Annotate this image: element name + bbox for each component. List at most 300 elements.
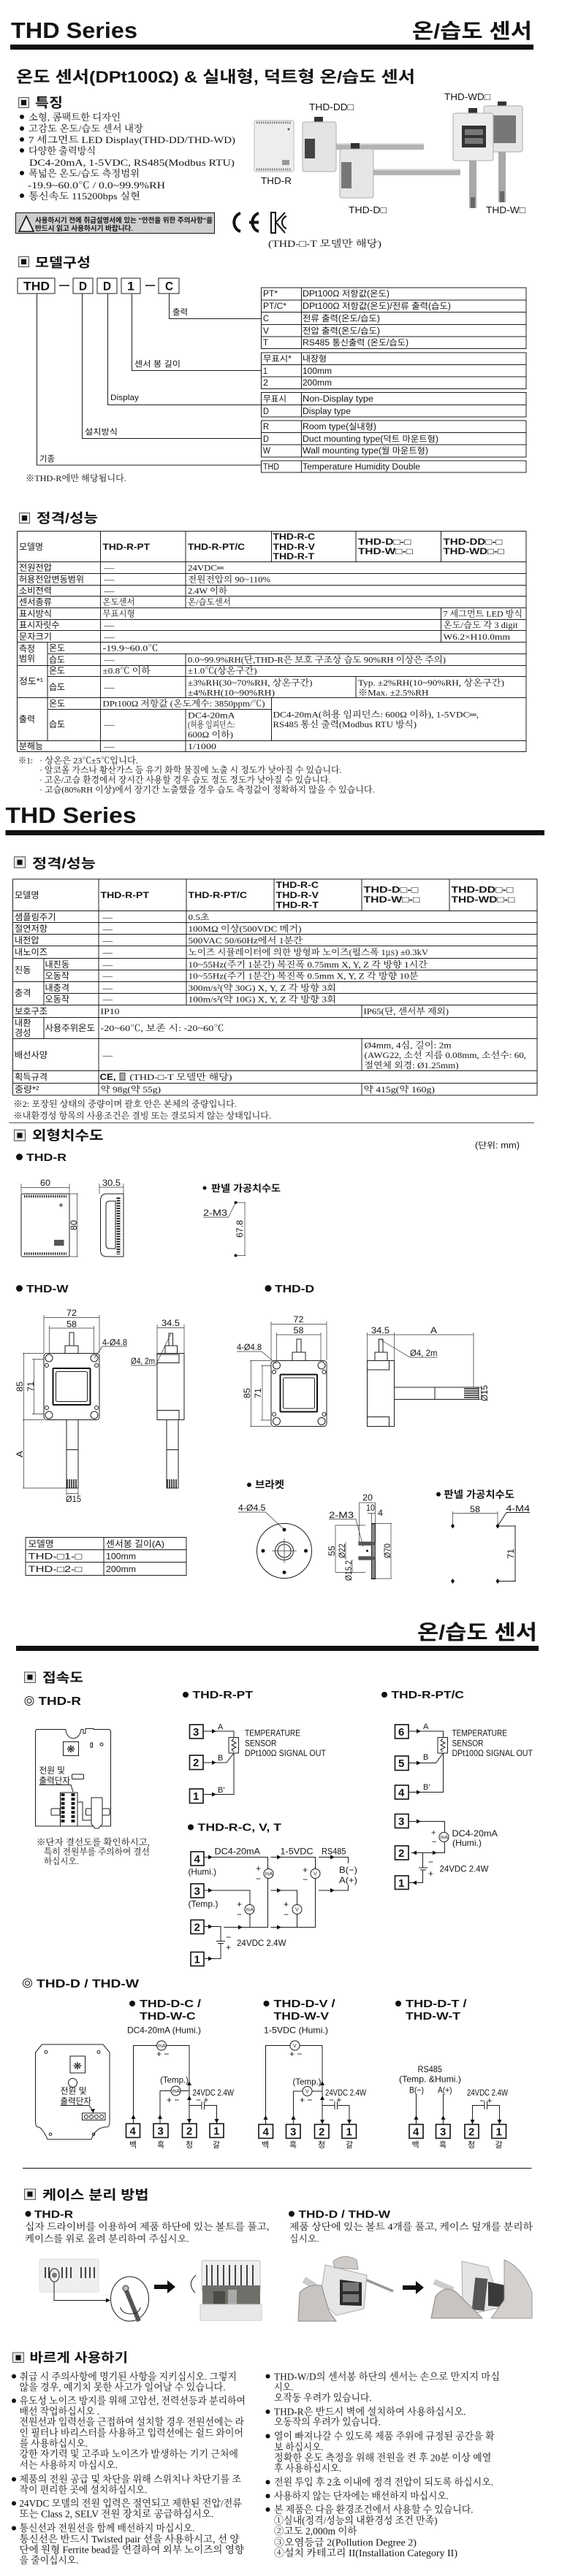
option tables: 전압 출력(온도/습도) (303, 326, 380, 336)
ratings table 2: THD-R-PT (101, 890, 150, 900)
wiring: THD-D-T / THD-W-T: 갈 (495, 2139, 503, 2150)
section heading: dimensions (15, 1129, 520, 1151)
ratings table 1: 습도 (49, 654, 65, 664)
ratings table 2: 500VAC 50/60Hz에서 1분간 (189, 935, 303, 946)
caution box: 반드시 읽고 사용하시기 바랍니다. (35, 224, 133, 233)
ratings table 1: 표시자릿수 (19, 620, 60, 630)
wiring: THD-R-PT/C: 1 (398, 1877, 404, 1890)
dimension drawing: panel cut-out bracket: 4-M4 (506, 1503, 530, 1514)
ratings footnotes 1: ※1: (18, 755, 33, 765)
wiring: THD-D-T / THD-W-T: A(+) (438, 2085, 452, 2096)
ratings table 2: THD-R-C (276, 880, 319, 890)
section heading: wiring: 접속도 (42, 1671, 83, 1685)
wiring: THD-D-C / THD-W-C: 2 (186, 2125, 192, 2138)
cautions: right column: 오동작의 우려가 있습니다. (274, 2415, 381, 2427)
wiring: THD-R-C, V, T: + (303, 1865, 308, 1875)
cautions: left column: 작이 편리한 곳에 설치하십시오. (19, 2484, 148, 2496)
wiring: THD-R-C, V, T: V (295, 1907, 299, 1913)
cautions: left column: 단에 원형 Ferrite bead를 연결하여 외부 노이즈의 영향 (19, 2544, 244, 2556)
ratings table 1: 온/습도센서 (188, 596, 231, 607)
ratings table 1: RS485 통신 출력(Modbus RTU 방식) (273, 718, 417, 729)
wiring: THD-D-V / THD-W-V: V (293, 2044, 297, 2049)
wiring: THD-R-C, V, T: − (284, 1909, 289, 1920)
wiring: THD-D-T / THD-W-T: B(−) (409, 2085, 424, 2096)
wiring: THD-D-V / THD-W-V: (Temp.) (292, 2077, 322, 2087)
wiring: THD-D-C / THD-W-C: 3 (158, 2125, 164, 2138)
wiring: THD-D-V / THD-W-V: 백 (262, 2140, 269, 2150)
wiring: THD-D-V / THD-W-V (259, 1998, 367, 2150)
ratings footnotes 2 (9, 1098, 534, 1123)
sensor length table: THD-□2-□ (28, 1564, 82, 1574)
wiring: THD-R-C, V, T: THD-R-C, V, T (197, 1822, 281, 1834)
wiring: THD-R-PT: 1 (193, 1790, 199, 1803)
wiring: THD-R-PT: SENSOR (245, 1738, 277, 1748)
code boxes (18, 278, 179, 294)
section heading: ratings 2 (15, 856, 96, 871)
dimension drawing: THD-D (237, 1283, 490, 1427)
wiring note (37, 1836, 150, 1866)
wiring: THD-R board: 전원 및 (39, 1766, 65, 1776)
ratings table 1: — (103, 562, 115, 572)
model footnote: ※THD-R에만 해당됩니다. (26, 472, 126, 483)
code boxes: 1 (127, 279, 134, 294)
ratings table 2: THD-DD□-□ (452, 885, 513, 895)
ratings table 2: 절연저항 (15, 924, 48, 934)
wiring note: 특히 전원부를 주의하여 결선 (44, 1846, 150, 1857)
wiring: THD-D-C / THD-W-C: 백 (129, 2140, 137, 2150)
ratings table 1: DPt100Ω 저항값 (온도계수: 3850ppm/℃) (102, 698, 265, 708)
cautions: right column: THD-R은 반드시 벽에 설치하여 사용하십시오. (274, 2405, 466, 2417)
wiring: THD-D-V / THD-W-V: 1-5VDC (Humi.) (264, 2025, 328, 2036)
wiring: THD-D-V / THD-W-V: 1 (346, 2126, 352, 2138)
ratings table 2: 사용주위온도 (45, 1023, 95, 1033)
wiring: THD-R-PT: DPt100Ω SIGNAL OUT (245, 1748, 327, 1758)
cautions: right column: 보 하십시오. (274, 2441, 323, 2453)
option tables: 무표시* (263, 354, 292, 364)
ratings table 1: 범위 (19, 653, 35, 664)
wiring: THD-D-V / THD-W-V: THD-D-V / (273, 1998, 335, 2010)
wiring: THD-D-V / THD-W-V: + − (300, 2095, 312, 2105)
wiring: THD-R-C, V, T: + (284, 1899, 289, 1909)
front view: 85 (242, 1388, 252, 1398)
cautions: right column: ④설치 카테고리 II(Installation Category II) (274, 2547, 457, 2558)
photo: THD-R: THD-R (261, 175, 292, 186)
features list: DC4-20mA, 1-5VDC, RS485(Modbus RTU) (29, 157, 235, 168)
side view: 34.5 (371, 1325, 390, 1335)
section heading: features (19, 96, 63, 110)
wiring: THD-R-PT/C: − (432, 1838, 436, 1847)
wiring: THD-R-C, V, T: V (314, 1872, 317, 1877)
wiring: THD-R board: THD-R (38, 1695, 82, 1708)
option tables: 100mm (303, 367, 332, 376)
features list: 통신속도 115200bps 실현 (28, 191, 140, 202)
front view (238, 1503, 311, 1579)
dimension drawing: panel cut-out bracket: 71 (506, 1549, 516, 1559)
wiring: THD-R-C, V, T: + (237, 1899, 242, 1909)
page header 2: THD Series (6, 802, 544, 835)
wiring: THD-D board: ❋ (73, 2061, 82, 2071)
ratings table 1: — (103, 719, 115, 729)
ratings table 2: 100m/s²(약 10G) X, Y, Z 각 방향 3회 (189, 993, 336, 1005)
ratings table 1: 센서종류 (19, 597, 52, 607)
cautions: right column: 사용하지 않는 단자에는 배선하지 마십시오. (274, 2490, 449, 2502)
cautions: right column: ②고도 2,000m 이하 (274, 2525, 357, 2537)
ratings table 2: CE, (99, 1072, 115, 1082)
dimension drawing: panel cut-out bracket (436, 1490, 530, 1584)
cautions: left column: 배선 작업하십시오 . (19, 2405, 99, 2417)
wiring: THD-R-C, V, T: B(−) (339, 1865, 357, 1875)
product title: 온도 센서(DPt100Ω) & 실내형, 덕트형 온/습도 센서 (16, 68, 415, 86)
ratings table 2: 10~55Hz(주기 1분간) 복진폭 0.5mm X, Y, Z 각 방향 10분 (189, 970, 419, 981)
ratings table 1: ※Max. ±2.5%RH (358, 688, 429, 698)
section heading: dimensions: (단위: mm) (475, 1141, 520, 1151)
dimension drawing: THD-W: THD-W (26, 1283, 69, 1295)
wiring: THD-D-T / THD-W-T: THD-D-T / (406, 1998, 466, 2010)
wiring: THD-R-C, V, T: − (237, 1909, 242, 1920)
side view (99, 1178, 123, 1257)
ratings table 1: 온도 (49, 698, 65, 708)
wiring: THD-R-C, V, T: 1-5VDC (281, 1846, 314, 1856)
leader labels: Display (110, 394, 140, 402)
ratings table 2: 0.5초 (189, 912, 210, 922)
photo: THD-D (340, 143, 460, 215)
cautions: right column: 본 제품은 다음 환경조건에서 사용할 수 있습니다. (274, 2503, 474, 2515)
caution box (16, 213, 215, 234)
ratings table 2: — (102, 1050, 113, 1060)
features list: 7 세그먼트 LED Display(THD-DD/THD-WD) (28, 134, 235, 145)
wiring: THD-D / THD-W heading: THD-D / THD-W (37, 1978, 140, 1990)
side view: Ø22 (337, 1544, 347, 1558)
section heading: model composition: 모델구성 (35, 256, 91, 270)
cautions: left column: 전원선과 입력선을 근접하여 설치할 경우 전원선에는 라 (19, 2415, 244, 2427)
section heading: case separation: 케이스 분리 방법 (42, 2188, 149, 2202)
side view (131, 1318, 184, 1488)
photo: THD-D/W case removal (298, 2256, 532, 2321)
front view: 72 (66, 1308, 77, 1318)
ratings table 2: 충격 (15, 988, 31, 998)
ratings table 1: 모델명 (19, 542, 43, 552)
wiring: THD-D-C / THD-W-C: DC4-20mA (Humi.) (127, 2025, 201, 2036)
ratings table 1: 온도센서 (102, 596, 134, 607)
wiring: THD-D-V / THD-W-V: 4 (263, 2126, 269, 2138)
code boxes: D (79, 279, 87, 294)
wiring: THD-R-PT: 2 (193, 1757, 199, 1769)
ratings table 1: DC4-20mA (188, 710, 235, 720)
option tables: DPt100Ω 저항값(온도) (303, 289, 390, 299)
code boxes: D (103, 279, 111, 294)
wiring: THD-R-PT/C: 3 (398, 1815, 404, 1828)
cautions: left column: 통신선은 반드시 Twisted pair 선을 사용하시고, 선 양 (19, 2533, 240, 2545)
sensor length table: 모델명 (28, 1539, 54, 1549)
case separation: THD-D/W text (289, 2208, 533, 2245)
wiring: THD-D-C / THD-W-C: 4 (130, 2125, 136, 2138)
wiring: THD-R-C, V, T: (Temp.) (189, 1898, 218, 1909)
ratings table 1: — (103, 654, 115, 664)
option tables: PT* (263, 290, 278, 299)
ratings table 2 (13, 879, 537, 1095)
wiring: THD-D-T / THD-W-T: 청 (468, 2140, 475, 2150)
ratings table 2: -20~60℃, 보존 시: -20~60℃ (101, 1023, 224, 1033)
ratings table 1: -19.9~60.0℃ (102, 643, 158, 653)
wiring: THD-D-T / THD-W-T: 백 (412, 2140, 419, 2150)
option tables: Room type(실내형) (303, 422, 376, 432)
wiring: THD-R-C, V, T (188, 1822, 357, 1966)
side view: 30.5 (102, 1178, 121, 1188)
ratings footnotes 2: ※내환경성 항목의 사용조건은 결빙 또는 결로되지 않는 상태입니다. (13, 1110, 271, 1121)
ratings table 1: — (103, 574, 115, 584)
side view (327, 1492, 392, 1581)
ratings table 1: THD-WD□-□ (443, 546, 504, 556)
side view: A (430, 1325, 437, 1335)
side view: Ø15 (479, 1385, 490, 1401)
section heading: ratings 1: 정격/성능 (37, 511, 98, 526)
wiring: THD-D-T / THD-W-T: (Temp. &Humi.) (399, 2074, 461, 2084)
option tables: R (263, 423, 269, 432)
front view: Ø15 (66, 1494, 81, 1504)
page header: THD Series: THD Series (11, 18, 137, 43)
ratings table 1: — (103, 586, 115, 596)
wiring: THD-R-C, V, T: A(+) (339, 1875, 357, 1885)
cautions: right column: 정확한 온도 측정을 위해 전원을 켠 후 20분 이상 예열 (274, 2452, 491, 2464)
option tables: 1 (263, 367, 267, 376)
wiring: THD-D-T / THD-W-T (395, 1998, 509, 2150)
wiring: THD-D board: 전원 및 (60, 2085, 86, 2096)
option tables: Duct mounting type(덕트 마운트형) (303, 434, 438, 444)
sensor length table: 100mm (106, 1551, 136, 1561)
ratings table 1: 분해능 (19, 741, 43, 751)
wiring: THD-D-C / THD-W-C: 1 (213, 2125, 219, 2138)
cautions: left column: 제품의 전원 공급 및 차단을 위해 스위치나 차단기를 조 (19, 2473, 241, 2485)
ratings table 2: — (102, 912, 113, 922)
ratings table 1: — (103, 741, 115, 751)
sensor length table: 센서봉 길이(A) (106, 1539, 164, 1549)
ratings table 1: 정도*¹ (19, 676, 43, 686)
cautions: left column: 통신선과 전원선을 함께 배선하지 마십시오. (19, 2522, 194, 2534)
ratings table 2: — (102, 971, 113, 981)
front view: 72 (294, 1314, 304, 1325)
ratings table 1: 온도 (49, 643, 65, 653)
option tables: W (263, 447, 270, 456)
side view: 34.5 (162, 1318, 180, 1328)
page header: THD Series (10, 18, 533, 50)
option tables: D (263, 435, 269, 444)
dimension drawing: THD-R: THD-R (26, 1151, 66, 1164)
ratings table 2: THD-R-PT/C (189, 890, 247, 900)
option tables: PT/C* (263, 302, 287, 311)
ratings table 2: 노이즈 시뮬레이터에 의한 방형파 노이즈(펄스폭 1㎲) ±0.3kV (189, 946, 428, 957)
cautions: left column: 유도성 노이즈 방지를 위해 고압선, 전력선등과 분리하여 (19, 2395, 246, 2407)
wiring: THD-R-PT/C: + (428, 1868, 433, 1879)
wiring: THD-D-C / THD-W-C: + − (167, 2095, 179, 2105)
wiring: THD-R-C, V, T: 2 (194, 1922, 200, 1933)
side view: Ø70 (382, 1544, 392, 1558)
wiring: THD-R board: 출력단자 (39, 1776, 70, 1786)
wiring: THD-D-T / THD-W-T: THD-W-T (406, 2011, 460, 2023)
wiring: THD-D-T / THD-W-T: 2 (468, 2126, 474, 2138)
side view: 10 (366, 1503, 375, 1513)
ratings table 1: 출력 (19, 714, 35, 724)
wiring: THD-R-PT/C: TEMPERATURE (452, 1728, 507, 1738)
leader labels: 기종 (39, 454, 55, 464)
ratings table 1: 표시방식 (19, 609, 52, 619)
sensor length table (26, 1538, 186, 1576)
option tables: 무표시 (263, 394, 286, 404)
wiring: THD-D-T / THD-W-T: 24VDC 2.4W (467, 2088, 509, 2098)
cautions: left column: 24VDC 모델의 전원 입력은 절연되고 제한된 전압/전류 (19, 2497, 242, 2509)
option tables: Display type (303, 407, 351, 416)
page header 3: temperature/humidity sensor: 온/습도 센서 (417, 1621, 537, 1644)
ratings table 1: 전원전압 (19, 562, 52, 572)
side view: Ø15.2 (343, 1560, 354, 1581)
wiring: THD-R-PT/C: mA (440, 1836, 448, 1840)
wiring: THD-D-C / THD-W-C: 갈 (213, 2139, 220, 2150)
ratings table 1: ±4%RH(10~90%RH) (188, 688, 275, 698)
wiring: THD-D-V / THD-W-V: 3 (290, 2126, 296, 2138)
ratings table 2: 절연체 외경: Ø1.25mm) (364, 1059, 459, 1070)
ratings table 2: THD-D□-□ (364, 885, 418, 895)
wiring: THD-R-PT: B (218, 1754, 223, 1763)
ratings table 2: 샘플링주기 (15, 912, 56, 922)
wiring: THD-R-C, V, T: mA (246, 1907, 254, 1913)
features list: -19.9~60.0℃ / 0.0~99.9%RH (28, 180, 165, 191)
ratings table 2: 약 98g(약 55g) (101, 1084, 161, 1095)
page header: THD Series: 온/습도 센서 (412, 20, 532, 42)
front view: 4-Ø4.5 (238, 1503, 266, 1513)
cautions: right column: ③오염등급 2(Pollution Degree 2) (274, 2537, 417, 2548)
ratings table 2: 100MΩ 이상(500VDC 메거) (189, 923, 301, 934)
wiring: THD-D-C / THD-W-C: − + (196, 2095, 208, 2105)
option tables: 2 (263, 379, 268, 388)
front view (15, 1308, 127, 1504)
features list: 고감도 온도/습도 센서 내장 (28, 123, 143, 134)
ratings table 1: 7 세그먼트 LED 방식 (443, 607, 522, 619)
section heading: features: 특징 (35, 96, 63, 110)
code boxes: C (165, 279, 173, 294)
wiring: THD-R-C, V, T: + (256, 1863, 261, 1874)
ratings table 1: 소비전력 (19, 586, 52, 596)
wiring: THD-D-C / THD-W-C: + − (156, 2049, 169, 2059)
dimension drawing: bracket: 브라켓 (255, 1479, 284, 1490)
front view (21, 1178, 79, 1257)
option tables: DPt100Ω 저항값(온도)/전류 출력(습도) (303, 302, 451, 311)
ratings table 1: ±3%RH(30~70%RH, 상온구간) (188, 677, 313, 688)
wiring: THD-D-T / THD-W-T: 1 (495, 2126, 502, 2138)
ratings table 1: ±0.8℃ 이하 (102, 664, 151, 676)
photo: THD-W and THD-WD: THD-WD□ (444, 91, 490, 102)
wiring: THD-R-PT/C: THD-R-PT/C (392, 1690, 465, 1701)
cautions: left column: 을 줄이십시오. (19, 2554, 79, 2566)
ratings table 1: 무표시형 (102, 607, 134, 619)
features list: 다양한 출력방식 (28, 145, 96, 156)
option tables: Temperature Humidity Double (303, 463, 420, 472)
case separation: THD-R text: 케이스를 위로 올려 분리하여 주십시오. (25, 2233, 189, 2245)
ratings table 2: 보호구조 (15, 1006, 48, 1016)
option tables: 내장형 (303, 354, 327, 364)
option tables: RS485 통신출력 (온도/습도) (303, 338, 408, 348)
wiring: THD-R board: ❋ (66, 1744, 75, 1755)
ratings table 1: 습도 (49, 682, 65, 692)
cautions: right column: 후 사용하십시오. (274, 2462, 342, 2474)
case separation: THD-R text: THD-R (34, 2208, 73, 2221)
wiring: THD-R-PT/C: DC4-20mA (452, 1828, 498, 1839)
ratings table 2: 배선사양 (15, 1050, 48, 1060)
features list: 폭넓은 온도/습도 측정범위 (28, 168, 140, 179)
wiring: THD-R-PT/C (381, 1690, 533, 1890)
ratings table 1: W6.2×H10.0mm (443, 632, 511, 642)
ratings table 1: 600Ω 이하) (188, 729, 233, 740)
ratings table 2: THD-R-T (276, 900, 319, 910)
side view: Ø4, 2m (131, 1356, 155, 1366)
ratings table 1: 문자크기 (19, 632, 52, 642)
ratings table 1: THD-R-PT/C (188, 542, 245, 552)
side view: 20 (362, 1492, 373, 1503)
wiring: THD-R-PT/C: 2 (398, 1847, 404, 1860)
ratings table 2: 내진동 (45, 959, 69, 970)
wiring: THD-D-T / THD-W-T: 4 (413, 2126, 419, 2138)
wiring: THD-R-PT (183, 1690, 327, 1803)
ratings table 1: ±1.0℃(상온구간) (188, 664, 257, 676)
wiring: THD-D-C / THD-W-C: mA (172, 2089, 180, 2094)
wiring: THD-R-C, V, T: − (256, 1874, 261, 1884)
section heading: ratings 1 (19, 511, 98, 526)
option tables: V (263, 327, 269, 336)
side view: 55 (327, 1546, 337, 1556)
ratings table 2: — (102, 935, 113, 946)
wiring: THD-D-T / THD-W-T: RS485 (418, 2064, 442, 2074)
dimension drawing: bracket (238, 1479, 392, 1581)
section heading: wiring (25, 1671, 83, 1685)
photo: THD-DD: THD-DD□ (309, 101, 354, 112)
wiring: THD-D-C / THD-W-C: 24VDC 2.4W (193, 2088, 235, 2098)
front view: 60 (40, 1178, 50, 1188)
wiring: THD-R-C, V, T: − (226, 1932, 231, 1942)
ratings table 2: IP10 (101, 1006, 120, 1016)
wiring: THD-D board: 출력단자 (60, 2097, 91, 2106)
dimension drawing: THD-W (15, 1283, 184, 1504)
option tables: D (263, 407, 269, 416)
wiring: THD-R-PT/C: 5 (398, 1757, 404, 1770)
photo: THD-W and THD-WD: THD-W□ (486, 204, 525, 215)
wiring: THD-R-C, V, T: (Humi.) (189, 1866, 216, 1877)
panel cut-out: THD-R: 67.8 (235, 1220, 245, 1238)
ratings footnotes 1: · 알코올 가스나 황산가스 등 유기 화학 물질에 노출 시 정도가 낮아질 수 있습니다. (39, 764, 342, 775)
sensor length table: 200mm (106, 1564, 136, 1574)
ratings table 1: — (103, 632, 115, 642)
wiring: THD-R-C, V, T: DC4-20mA (215, 1846, 260, 1856)
ratings table 1: 2.4W 이하 (188, 585, 227, 596)
ratings table 2: 내충격 (45, 983, 69, 993)
ratings table 2: 획득규격 (15, 1072, 48, 1082)
wiring: THD-R-C, V, T: − (303, 1874, 308, 1885)
wiring: THD-R-C, V, T: 1 (194, 1954, 200, 1966)
section heading: dimensions: 외형치수도 (32, 1129, 104, 1143)
wiring: THD-D-C / THD-W-C: THD-D-C / (140, 1998, 201, 2010)
panel cut-out: THD-R: 판넬 가공치수도 (211, 1183, 281, 1194)
wiring: THD-D-C / THD-W-C: THD-W-C (140, 2011, 196, 2023)
cautions: left column: 않을 경우, 예기치 못한 사고가 일어날 수 있습니다. (19, 2381, 225, 2393)
ratings table 1: THD-D□-□ (358, 537, 411, 547)
wiring: THD-D-V / THD-W-V: V (305, 2090, 309, 2094)
wiring: THD-R-C, V, T: 24VDC 2.4W (237, 1938, 286, 1948)
ratings table 2: IP65(단, 센서부 제외) (364, 1005, 449, 1016)
ratings table 2: (AWG22, 소선 지름 0.08mm, 소선수: 60, (364, 1049, 526, 1060)
side view (367, 1325, 490, 1427)
panel cut-out: THD-R: 2-M3 (203, 1208, 227, 1218)
option tables (262, 288, 526, 472)
wiring: THD-R-PT/C: A (423, 1722, 429, 1731)
wiring: THD-R board (25, 1695, 111, 1828)
ratings table 1: Typ. ±2%RH(10~90%RH, 상온구간) (358, 677, 504, 688)
